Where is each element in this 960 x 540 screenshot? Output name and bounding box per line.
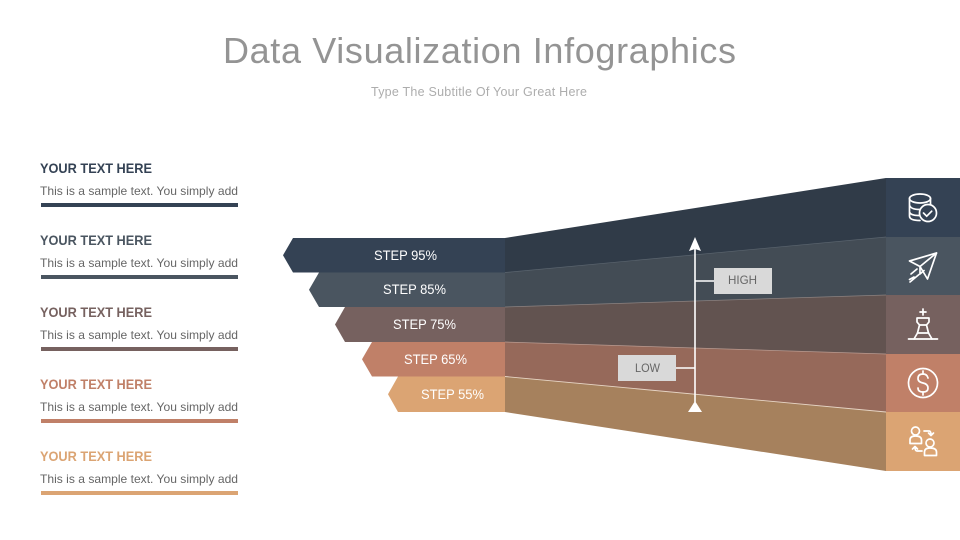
step bar 85%: STEP 85% xyxy=(383,282,446,297)
step bar 65% xyxy=(362,342,505,376)
icon: chess piece xyxy=(908,309,938,339)
icon tile: dollar xyxy=(886,354,960,412)
text block 4: This is a sample text. You simply add xyxy=(40,400,238,414)
icon tile: chess piece xyxy=(886,295,960,354)
perspective band 2 xyxy=(505,237,886,307)
step bar 95%: STEP 95% xyxy=(374,248,437,263)
label: high xyxy=(695,268,772,294)
text block 1: This is a sample text. You simply add xyxy=(40,184,238,198)
step bar 85% xyxy=(309,272,505,307)
text block 2: YOUR TEXT HERE xyxy=(40,232,152,248)
text block 1: YOUR TEXT HERE xyxy=(40,160,152,176)
icon: paper plane xyxy=(910,253,936,282)
step bar 95% xyxy=(283,238,505,272)
text block 5 xyxy=(40,448,238,495)
title: Data Visualization Infographics xyxy=(223,30,736,71)
step bar 75% xyxy=(335,307,505,342)
text block 4 xyxy=(40,376,238,423)
perspective band 1 xyxy=(505,178,886,272)
step bar 55%: STEP 55% xyxy=(421,387,484,402)
icon tile: users exchange xyxy=(886,412,960,471)
text block 5: This is a sample text. You simply add xyxy=(40,472,238,486)
label: low xyxy=(618,355,695,381)
perspective band 4 xyxy=(505,342,886,412)
arrow: low to high scale xyxy=(688,237,702,412)
icon: users exchange xyxy=(910,427,936,456)
step bar 65%: STEP 65% xyxy=(404,352,467,367)
icon tile: database xyxy=(886,178,960,238)
text block 3: YOUR TEXT HERE xyxy=(40,304,152,320)
perspective band 3 xyxy=(505,295,886,354)
label: low: LOW xyxy=(635,361,661,375)
perspective band 5 xyxy=(505,376,886,471)
step bar 55% xyxy=(388,376,505,412)
text block 1 xyxy=(40,160,238,207)
text block 5: YOUR TEXT HERE xyxy=(40,448,152,464)
text block 4: YOUR TEXT HERE xyxy=(40,376,152,392)
text block 2 xyxy=(40,232,238,279)
subtitle: Type The Subtitle Of Your Great Here xyxy=(371,85,587,99)
step bar 75%: STEP 75% xyxy=(393,317,456,332)
label: high: HIGH xyxy=(728,273,757,287)
icon: database check xyxy=(910,194,936,222)
icon: dollar coin xyxy=(908,368,938,398)
icon tile: paper plane xyxy=(886,237,960,296)
text block 3 xyxy=(40,304,238,351)
text block 3: This is a sample text. You simply add xyxy=(40,328,238,342)
text block 2: This is a sample text. You simply add xyxy=(40,256,238,270)
